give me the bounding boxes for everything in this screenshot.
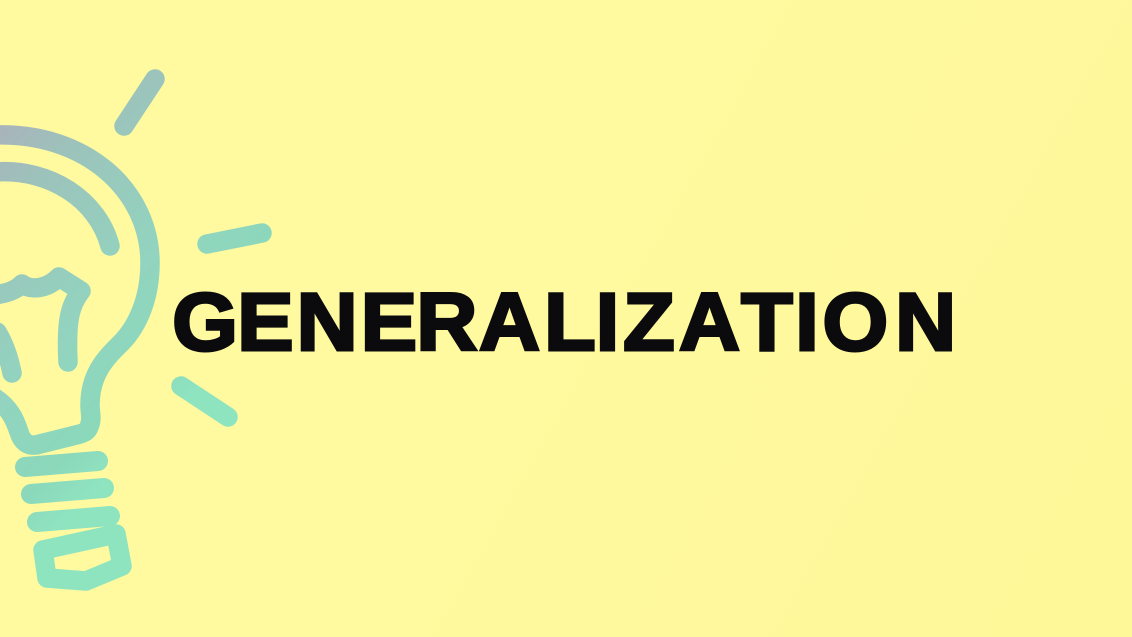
ray: right bbox=[207, 233, 262, 244]
title: GENERALIZATION bbox=[172, 276, 956, 368]
filament left stem bbox=[0, 332, 12, 373]
icon: light bulb bbox=[0, 79, 262, 581]
bulb glass outline bbox=[0, 135, 150, 445]
filament bbox=[0, 277, 81, 362]
screw thread 3 bbox=[37, 516, 110, 522]
ray: lower bbox=[181, 386, 228, 417]
screw thread 2 bbox=[31, 488, 104, 494]
ray: top bbox=[124, 79, 155, 126]
inner glass highlight bbox=[0, 172, 110, 246]
screw thread 1 bbox=[25, 461, 98, 467]
screw cap bbox=[43, 534, 122, 581]
